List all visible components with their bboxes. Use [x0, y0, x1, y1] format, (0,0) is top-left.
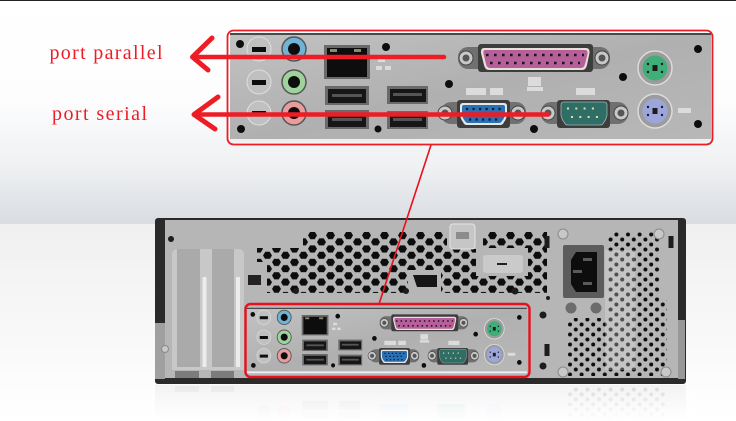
- arrow: serial port: [194, 97, 548, 129]
- highlight frame on computer I/O panel: [246, 304, 530, 377]
- reflection fade: [150, 385, 695, 421]
- label: port parallel: port parallel: [50, 42, 163, 64]
- connector line from computer to enlarged panel: [379, 145, 431, 304]
- label: port serial: port serial: [52, 103, 147, 125]
- computer rear panel: [155, 218, 686, 384]
- enlarged I/O panel: [230, 33, 711, 142]
- highlight frame on enlarged panel: [228, 30, 712, 144]
- reflection of the computer: [155, 385, 686, 421]
- arrow: parallel port: [192, 38, 444, 70]
